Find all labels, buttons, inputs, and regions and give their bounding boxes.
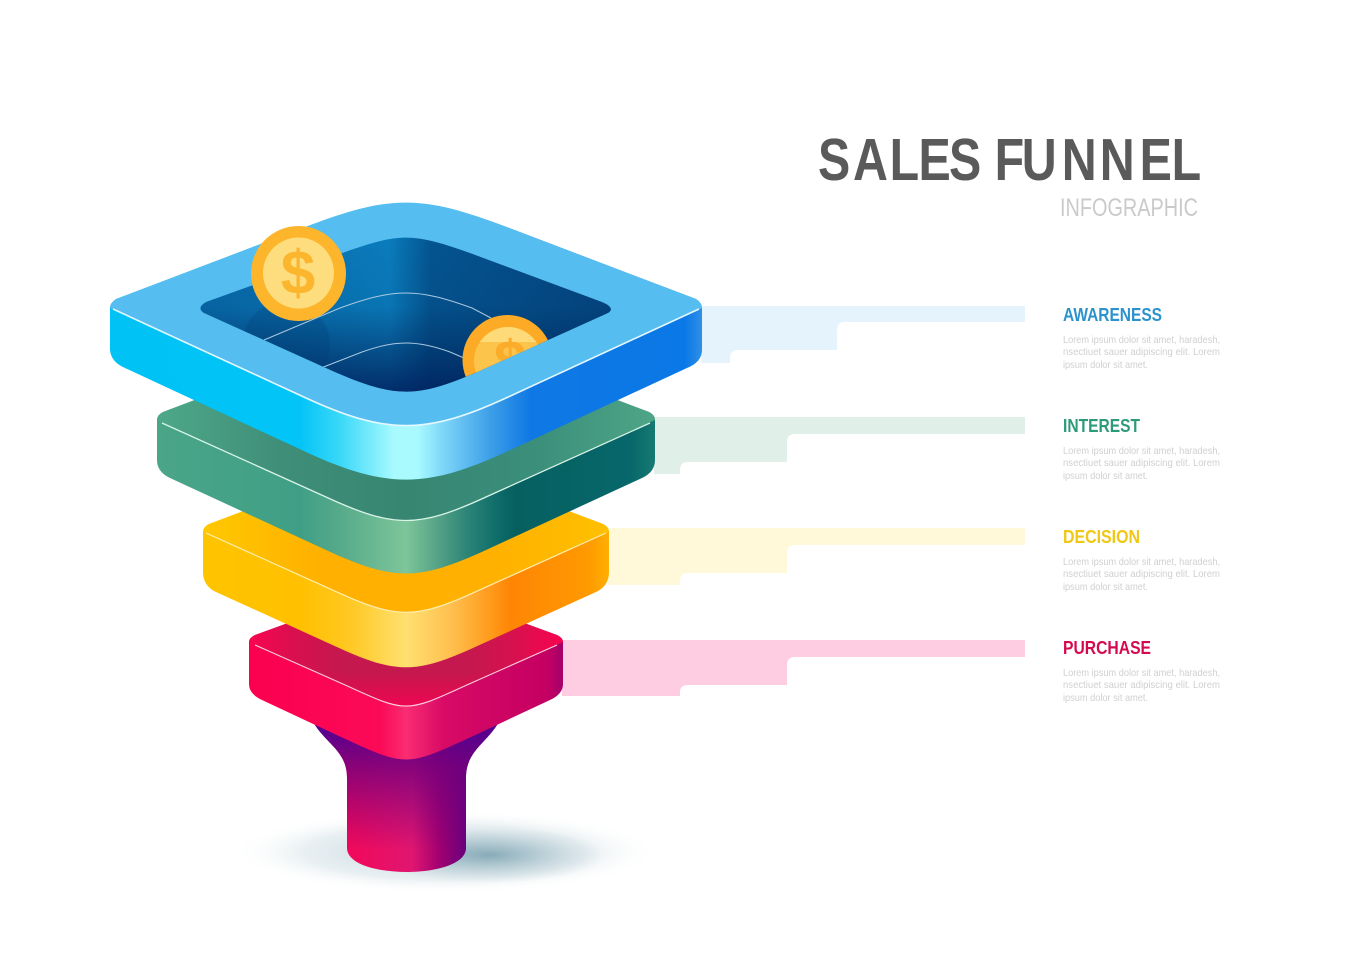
- ribbon: interest: [654, 417, 1025, 474]
- ribbon: decision: [608, 528, 1025, 585]
- heading: INTEREST: [1063, 416, 1140, 436]
- funnel opening: [200, 238, 611, 392]
- heading: AWARENESS: [1063, 305, 1162, 325]
- funnel stem: [300, 705, 512, 872]
- description: nsectiuet sauer adipiscing elit. Lorem: [1063, 679, 1220, 691]
- heading: DECISION: [1063, 527, 1140, 547]
- ribbon: purchase: [562, 640, 1025, 696]
- funnel layer: purchase (red): [249, 580, 563, 760]
- title block: [818, 128, 1201, 222]
- description: ipsum dolor sit amet.: [1063, 470, 1148, 482]
- description: ipsum dolor sit amet.: [1063, 692, 1148, 704]
- description: nsectiuet sauer adipiscing elit. Lorem: [1063, 457, 1220, 469]
- subtitle: infographic: INFOGRAPHIC: [1060, 194, 1198, 222]
- ribbon: awareness: [701, 306, 1025, 363]
- icon: coin on rim: $: [281, 239, 315, 308]
- floor shadow: [230, 810, 660, 894]
- icon: coin inside funnel: [462, 315, 548, 377]
- label: awareness: [1063, 305, 1220, 371]
- funnel layer: interest (green): [157, 320, 655, 573]
- title: sales funnel: SALES FUNNEL: [818, 128, 1201, 193]
- heading: PURCHASE: [1063, 638, 1151, 658]
- description: ipsum dolor sit amet.: [1063, 581, 1148, 593]
- description: Lorem ipsum dolor sit amet, haradesh,: [1063, 334, 1220, 346]
- description: Lorem ipsum dolor sit amet, haradesh,: [1063, 445, 1220, 457]
- icon: coin inside funnel: $: [494, 329, 526, 394]
- funnel layer: awareness (blue): [110, 203, 702, 480]
- description: Lorem ipsum dolor sit amet, haradesh,: [1063, 556, 1220, 568]
- description: nsectiuet sauer adipiscing elit. Lorem: [1063, 568, 1220, 580]
- label: interest: [1063, 416, 1220, 482]
- label: purchase: [1063, 638, 1220, 704]
- funnel layer: decision (yellow): [203, 450, 609, 667]
- rim highlight: [113, 309, 699, 426]
- description: Lorem ipsum dolor sit amet, haradesh,: [1063, 667, 1220, 679]
- description: nsectiuet sauer adipiscing elit. Lorem: [1063, 346, 1220, 358]
- blue outer side wall: [110, 203, 702, 480]
- icon: coin on rim: [251, 226, 346, 321]
- label: decision: [1063, 527, 1220, 593]
- blue rim top surface: [110, 203, 702, 426]
- description: ipsum dolor sit amet.: [1063, 359, 1148, 371]
